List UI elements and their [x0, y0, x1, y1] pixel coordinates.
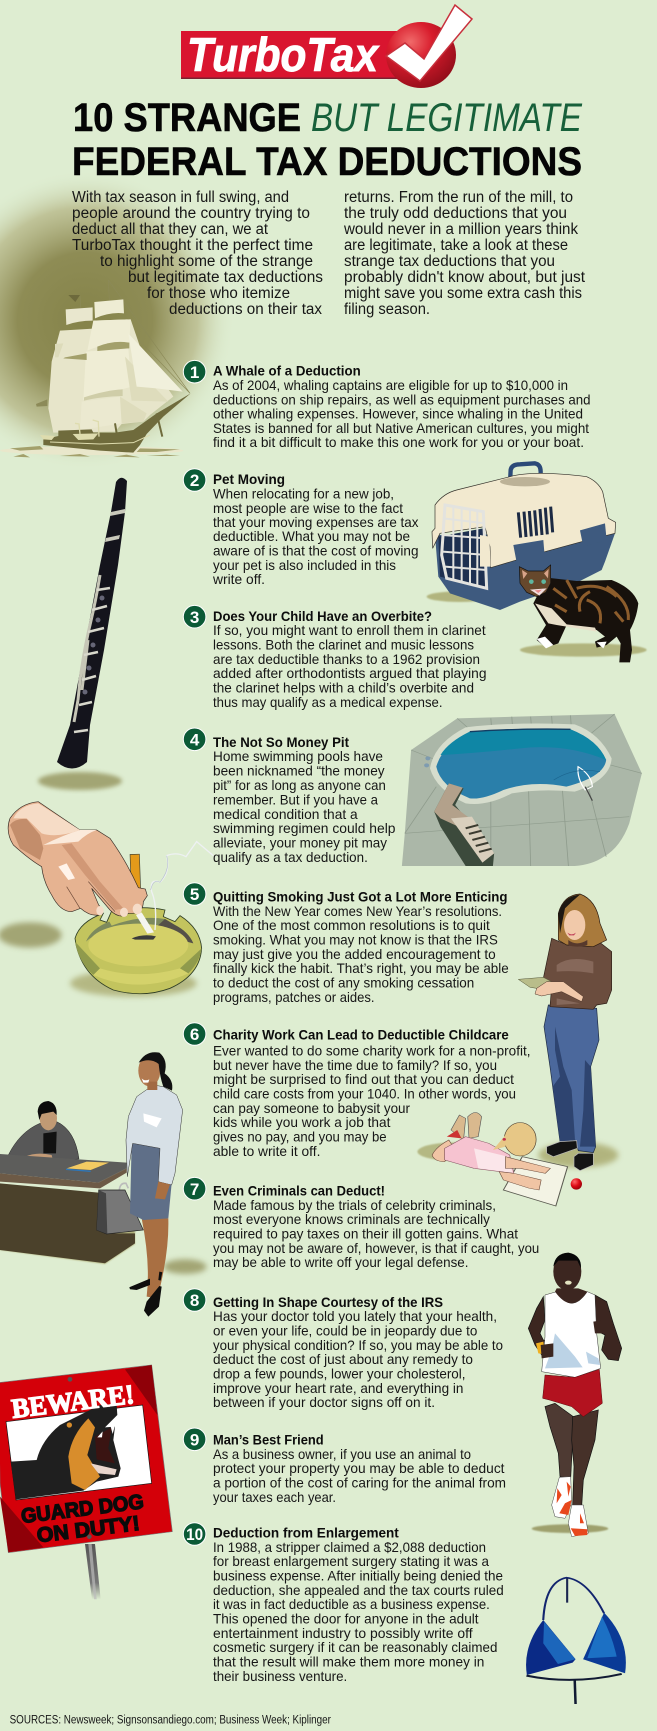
body text: most everyone knows criminals are technically — [213, 1212, 490, 1227]
title: BUT LEGITIMATE — [311, 96, 583, 140]
body text: qualify as a tax deduction. — [213, 850, 368, 865]
TurboTax logo: TurboTax — [187, 28, 380, 81]
body text: might be surprised to find out that you can deduct — [213, 1072, 514, 1087]
panel: item 4 — [183, 728, 396, 865]
icon: woman counting money — [518, 894, 618, 1190]
body text: With the New Year comes New Year’s resolutions. — [213, 904, 502, 919]
number badge 5: 5 — [190, 885, 199, 904]
body text: for breast enlargement surgery stating it was a — [213, 1554, 489, 1569]
body text: your pet is also included in this — [213, 558, 396, 573]
number badge 6: 6 — [190, 1025, 199, 1044]
number badge 8 — [183, 1289, 206, 1311]
body text: alleviate, your money pit may — [213, 836, 387, 850]
body text: remember. But if you have a — [213, 792, 378, 808]
intro text right column: filing season. — [344, 301, 430, 318]
heading: Charity Work Can Lead to Deductible Childcare — [213, 1028, 509, 1042]
body text: child care costs from your 1040. In other words, you — [213, 1086, 516, 1102]
number badge 1 — [183, 360, 206, 383]
TurboTax logo — [181, 5, 472, 88]
body text — [213, 623, 486, 710]
body text — [213, 1540, 504, 1684]
heading: Getting In Shape Courtesy of the IRS — [213, 1295, 443, 1310]
intro text left column: TurboTax thought it the perfect time — [72, 237, 313, 254]
number badge 3: 3 — [190, 608, 199, 627]
body text: the clarinet helps with a child’s overbite and — [213, 680, 474, 696]
icon: blue bikini top — [526, 1578, 626, 1704]
panel: item 6 — [183, 1023, 531, 1159]
body text: it was in fact deductible as a business expense. — [213, 1597, 490, 1612]
heading: The Not So Money Pit — [213, 735, 349, 750]
body text: In 1988, a stripper claimed a $2,088 deduction — [213, 1540, 486, 1555]
body text: entertainment industry to possibly write off — [213, 1626, 473, 1641]
body text: to deduct the cost of any smoking cessation — [213, 976, 474, 990]
body text: swimming regimen could help — [213, 821, 396, 836]
intro text right column: are legitimate, take a look at these — [344, 237, 568, 254]
body text: business expense. After initially being denied the — [213, 1568, 503, 1584]
intro text left column: for those who itemize — [147, 285, 290, 302]
body text: cosmetic surgery if it can be reasonably claimed — [213, 1640, 497, 1655]
number badge 2 — [183, 469, 206, 491]
panel: item 1 — [183, 360, 591, 450]
intro text left column: but legitimate tax deductions — [128, 269, 323, 286]
number badge 7 — [183, 1177, 206, 1200]
body text: deductions on ship repairs, as well as equipment purchases and — [213, 392, 590, 408]
heading: Man’s Best Friend — [213, 1432, 324, 1448]
body text: a portion of the cost of caring for the animal from — [213, 1476, 506, 1490]
body text: write off. — [212, 572, 265, 587]
number badge 10: 10 — [186, 1525, 203, 1544]
body text — [213, 1309, 503, 1410]
body text: protect your property you may be able to deduct — [213, 1461, 505, 1476]
intro text left column — [72, 189, 323, 318]
body text: may just give you the added encouragement to — [213, 947, 496, 962]
intro text right column: might save you some extra cash this — [344, 285, 582, 302]
number badge 9 — [183, 1428, 206, 1451]
body text: When relocating for a new job, — [213, 486, 394, 502]
icon: pet carrier — [427, 463, 647, 662]
body text: your taxes each year. — [213, 1490, 336, 1505]
body text — [213, 1044, 530, 1159]
heading: A Whale of a Deduction — [213, 364, 361, 378]
body text: can pay someone to babysit your — [213, 1101, 410, 1116]
body text — [213, 1198, 539, 1270]
icon: swimming pool — [402, 714, 642, 866]
icon: clarinet — [38, 478, 127, 790]
body text: Made famous by the trials of celebrity criminals, — [213, 1198, 496, 1213]
body text: States is banned for all but Native American cultures, you might — [213, 421, 589, 436]
heading: Pet Moving — [213, 472, 285, 487]
body text — [213, 904, 509, 1005]
icon: runner — [528, 1253, 622, 1537]
icon: tabby cat — [519, 565, 647, 662]
number badge 2: 2 — [190, 471, 199, 490]
body text: lessons. Both the clarinet and music lessons — [213, 638, 474, 652]
body text: finally kick the habit. That’s right, you may be able — [213, 961, 509, 976]
icon: beware guard dog sign: BEWARE! — [10, 1379, 136, 1424]
body text: are tax deductible thanks to a 1962 provision — [213, 652, 480, 667]
body text — [213, 378, 590, 450]
intro text right column: the truly odd deductions that you — [344, 205, 567, 222]
heading: Even Criminals can Deduct! — [213, 1184, 385, 1198]
icon: red ball — [571, 1178, 582, 1190]
body text: aware of is that the cost of moving — [213, 544, 418, 558]
sources: SOURCES: Newsweek; Signsonsandiego.com; Business Week; Kiplinger — [10, 1714, 331, 1726]
body text: or even your life, could be in jeopardy due to — [213, 1324, 478, 1338]
icon: hand stubbing cigarette in ashtray — [0, 802, 213, 997]
body text: most people are wise to the fact — [213, 501, 403, 516]
title — [72, 96, 583, 184]
icon: beware guard dog sign: ON DUTY! — [36, 1512, 141, 1547]
intro text right column: probably didn't know about, but just — [344, 269, 586, 286]
icon: girl drawing on the floor — [417, 1112, 568, 1206]
body text: smoking. What you may not know is that the IRS — [213, 932, 498, 948]
title: FEDERAL TAX DEDUCTIONS — [72, 140, 582, 184]
title: 10 STRANGE — [73, 96, 301, 140]
body text: programs, patches or aides. — [213, 990, 374, 1005]
body text: medical condition that a — [213, 807, 358, 822]
body text: you may not be aware of, however, is that if caught, you — [213, 1241, 539, 1256]
number badge 5 — [183, 883, 206, 905]
intro text right column — [343, 189, 586, 318]
olive glow behind ship — [0, 170, 235, 470]
heading: Does Your Child Have an Overbite? — [213, 609, 432, 624]
body text: but never have the time due to family? If so, you — [213, 1058, 497, 1073]
intro text right column: would never in a million years think — [343, 221, 578, 238]
body text: pit” for as long as anyone can — [213, 778, 386, 793]
number badge 7: 7 — [190, 1180, 199, 1199]
body text — [212, 486, 419, 587]
panel: item 10 — [183, 1523, 504, 1684]
icon: businesswoman, man and desk — [0, 1052, 207, 1317]
body text: One of the most common resolutions is to quit — [213, 918, 490, 933]
body text: added after orthodontists argued that playing — [213, 666, 486, 681]
body text: find it a bit difficult to make this one work for you or your boat. — [213, 435, 584, 450]
heading: Deduction from Enlargement — [213, 1526, 399, 1540]
body text: deductible. What you may not be — [213, 529, 410, 544]
body text: Home swimming pools have — [213, 749, 383, 764]
body text: their business venture. — [213, 1669, 347, 1684]
number badge 6 — [183, 1023, 206, 1045]
body text — [213, 1447, 506, 1505]
body text: As of 2004, whaling captains are eligible for up to $10,000 in — [213, 378, 568, 393]
intro text left column: to highlight some of the strange — [100, 253, 313, 270]
panel: item 7 — [183, 1177, 539, 1270]
panel: item 2 — [183, 469, 419, 587]
body text: This opened the door for anyone in the adult — [213, 1612, 479, 1626]
panel: item 9 — [183, 1428, 506, 1505]
body text: drop a few pounds, lower your cholesterol, — [213, 1366, 466, 1382]
body text: improve your heart rate, and everything in — [213, 1381, 463, 1396]
body text: deduction, she appealed and the tax courts ruled — [213, 1583, 504, 1598]
body text: between if your doctor signs off on it. — [213, 1395, 435, 1410]
body text: been nicknamed “the money — [213, 764, 385, 778]
body text: Ever wanted to do some charity work for a non-profit, — [213, 1044, 530, 1058]
panel: item 3 — [183, 605, 487, 710]
body text: kids while you work a job that — [213, 1115, 391, 1130]
panel: item 8 — [183, 1289, 503, 1410]
body text: that your moving expenses are tax — [213, 515, 419, 530]
body text: deduct the cost of just about any remedy to — [213, 1352, 473, 1367]
number badge 8: 8 — [190, 1291, 199, 1310]
icon: beware guard dog sign — [0, 1365, 172, 1599]
panel: item 5 — [183, 883, 509, 1005]
icon: beware guard dog sign: GUARD DOG — [20, 1490, 145, 1528]
body text: Has your doctor told you lately that your health, — [213, 1309, 497, 1324]
body text: that the result will make them more money in — [213, 1654, 484, 1670]
intro text right column: strange tax deductions that you — [344, 253, 555, 270]
icon: sailing ship — [0, 280, 191, 457]
number badge 9: 9 — [190, 1430, 199, 1450]
body text: your physical condition? If so, you may be able to — [213, 1338, 503, 1353]
body text: able to write it off. — [213, 1144, 320, 1159]
intro text right column: returns. From the run of the mill, to — [344, 189, 573, 206]
body text: thus may qualify as a medical expense. — [213, 695, 442, 710]
body text: may be able to write off your legal defense. — [213, 1255, 468, 1270]
intro text left column: With tax season in full swing, and — [72, 189, 289, 206]
intro text left column: deduct all that they can, we at — [72, 221, 269, 238]
heading: Quitting Smoking Just Got a Lot More Enticing — [213, 890, 508, 904]
body text — [213, 749, 396, 865]
number badge 4: 4 — [190, 730, 200, 750]
body text: required to pay taxes on their ill gotten gains. What — [213, 1226, 518, 1242]
intro text left column: deductions on their tax — [169, 301, 322, 318]
number badge 1: 1 — [190, 363, 199, 382]
body text: As a business owner, if you use an animal to — [213, 1447, 471, 1462]
body text: gives no pay, and you may be — [213, 1130, 387, 1144]
intro text left column: people around the country trying to — [72, 205, 310, 222]
body text: If so, you might want to enroll them in clarinet — [213, 623, 486, 638]
number badge 3 — [183, 605, 206, 628]
number badge 4 — [183, 728, 206, 751]
body text: other whaling expenses. However, since whaling in the United — [213, 406, 583, 422]
